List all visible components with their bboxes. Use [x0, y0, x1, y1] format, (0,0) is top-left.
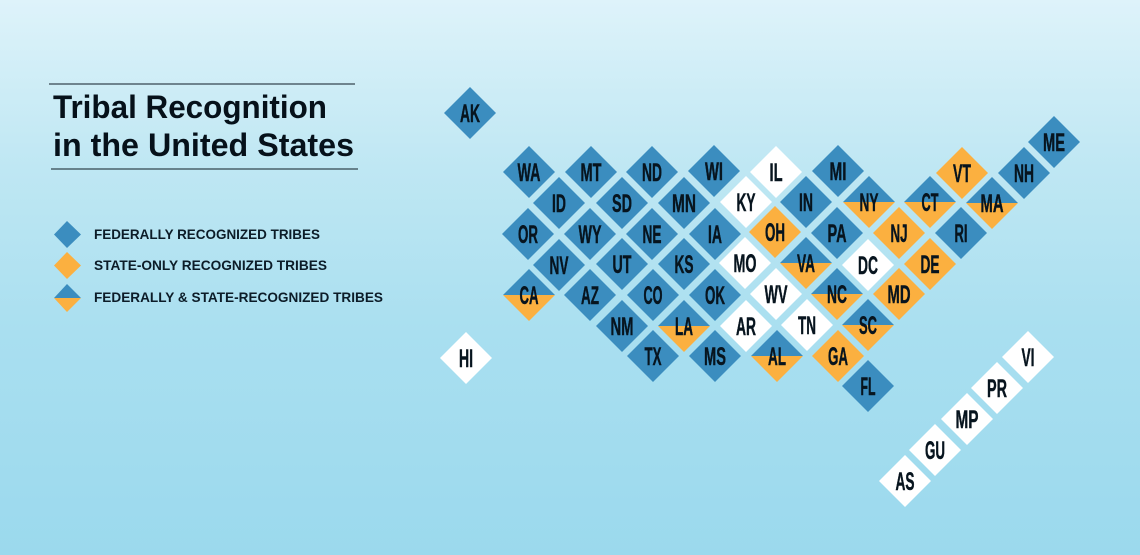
- tile: VT: [936, 147, 988, 199]
- tile: AL: AL: [768, 343, 786, 371]
- tile: OH: OH: [765, 219, 785, 247]
- tile: TX: TX: [644, 343, 662, 371]
- tile: DC: DC: [858, 252, 878, 280]
- tile: RI: RI: [954, 220, 968, 248]
- tile: AZ: AZ: [581, 282, 599, 310]
- tile: VI: [1002, 331, 1054, 383]
- tile: OH: [749, 206, 801, 258]
- tile: TN: [781, 299, 833, 351]
- tile: GA: [812, 330, 864, 382]
- tile: LA: LA: [675, 313, 693, 341]
- tile: OR: [502, 208, 554, 260]
- tile: ID: ID: [552, 190, 566, 218]
- title: in the United States: [53, 127, 354, 163]
- tile: NC: NC: [827, 281, 847, 309]
- legend item: federally and state recognized: [54, 284, 383, 312]
- tile: NE: [626, 208, 678, 260]
- tile: NH: NH: [1014, 160, 1034, 188]
- tile: TN: TN: [798, 312, 816, 340]
- tile: DE: [904, 238, 956, 290]
- tile: WA: WA: [518, 159, 540, 187]
- tile: OK: OK: [705, 282, 725, 310]
- legend: [54, 221, 383, 312]
- tile: AR: AR: [736, 313, 756, 341]
- tile: AK: [444, 87, 496, 139]
- tile: MO: MO: [734, 250, 756, 278]
- tile: VT: VT: [953, 160, 971, 188]
- title: Tribal Recognition: [53, 89, 327, 125]
- tile: GU: GU: [925, 437, 945, 465]
- tile: CT: CT: [922, 189, 938, 217]
- title: [49, 84, 358, 169]
- tile: MP: [941, 393, 993, 445]
- tile: TX: [627, 330, 679, 382]
- tile: ND: ND: [642, 159, 662, 187]
- tile: PA: PA: [828, 220, 846, 248]
- tile: IA: [689, 208, 741, 260]
- tile: CO: [627, 269, 679, 321]
- tile: MS: MS: [704, 343, 726, 371]
- tile: AS: AS: [896, 468, 914, 496]
- tile: MI: [812, 145, 864, 197]
- legend item: state-only recognized: STATE-ONLY RECOGNIZED TRIBES: [94, 257, 327, 273]
- tile: KY: KY: [736, 189, 756, 217]
- tile: CA: [503, 269, 555, 321]
- tile: MN: [658, 177, 710, 229]
- tile: FL: [842, 360, 894, 412]
- tile: SD: [596, 177, 648, 229]
- tile: RI: [935, 207, 987, 259]
- tile: OR: OR: [518, 221, 538, 249]
- tile: MT: MT: [581, 159, 601, 187]
- tile: CA: CA: [520, 282, 538, 310]
- tile: FL: FL: [860, 373, 876, 401]
- legend item: federally and state recognized: FEDERALLY & STATE-RECOGNIZED TRIBES: [94, 289, 383, 305]
- tile: AS: [879, 455, 931, 507]
- tile: WI: [688, 145, 740, 197]
- tile: NC: [811, 268, 863, 320]
- tile: NM: NM: [610, 313, 634, 341]
- tile: ME: [1028, 116, 1080, 168]
- tile: SC: SC: [859, 312, 877, 340]
- tile: NM: [596, 300, 648, 352]
- tile: ME: ME: [1043, 129, 1065, 157]
- tile: MS: [689, 330, 741, 382]
- tile: WI: WI: [705, 158, 723, 186]
- legend item: federally recognized: FEDERALLY RECOGNIZED TRIBES: [94, 226, 320, 242]
- tile: NY: [843, 176, 895, 228]
- tile: IA: IA: [708, 221, 722, 249]
- tile: NJ: NJ: [890, 220, 908, 248]
- tile: IN: IN: [799, 189, 813, 217]
- tile: WA: [503, 146, 555, 198]
- tile: UT: [596, 238, 648, 290]
- legend item: state-only recognized: [54, 252, 327, 279]
- tile: WY: WY: [578, 221, 602, 249]
- tile: HI: [440, 332, 492, 384]
- tile: GU: [909, 424, 961, 476]
- tile: PR: [971, 362, 1023, 414]
- tile: VA: VA: [797, 250, 815, 278]
- tile map: [440, 87, 1080, 507]
- tile: LA: [658, 300, 710, 352]
- tile: IL: [750, 146, 802, 198]
- tile: ID: [533, 177, 585, 229]
- tile: UT: UT: [612, 251, 632, 279]
- tile: MI: MI: [830, 158, 846, 186]
- tile: GA: GA: [828, 343, 848, 371]
- tile: NV: NV: [550, 252, 569, 280]
- tile: AZ: [564, 269, 616, 321]
- tile: MD: MD: [888, 281, 910, 309]
- legend item: federally recognized: [54, 221, 320, 248]
- tile: MA: MA: [980, 190, 1004, 218]
- tile: AR: [720, 300, 772, 352]
- tile: PA: [811, 207, 863, 259]
- tile: MP: MP: [956, 406, 978, 434]
- tile: KY: [720, 176, 772, 228]
- tile: WY: [564, 208, 616, 260]
- tile: MD: [873, 268, 925, 320]
- tile: MN: MN: [672, 190, 696, 218]
- tile: KS: [658, 238, 710, 290]
- tile: AL: [751, 330, 803, 382]
- tile: IN: [780, 176, 832, 228]
- tile: OK: [689, 269, 741, 321]
- tile: MT: [565, 146, 617, 198]
- tile: NE: NE: [642, 221, 662, 249]
- tile: NY: NY: [860, 189, 879, 217]
- tile: VI: VI: [1022, 344, 1034, 372]
- tile: HI: HI: [459, 345, 473, 373]
- tile: CT: [904, 176, 956, 228]
- tile: NJ: [873, 207, 925, 259]
- tile: CO: CO: [644, 282, 662, 310]
- tile: VA: [780, 237, 832, 289]
- tile: IL: IL: [770, 159, 782, 187]
- tile: WV: [750, 268, 802, 320]
- tile: WV: WV: [764, 281, 788, 309]
- tile: SC: [842, 299, 894, 351]
- tile: AK: AK: [460, 100, 480, 128]
- tile: DC: [842, 239, 894, 291]
- tile: NV: [533, 239, 585, 291]
- tile: KS: KS: [674, 251, 694, 279]
- tile: MO: [719, 237, 771, 289]
- tile: PR: PR: [987, 375, 1007, 403]
- tile: DE: DE: [920, 251, 940, 279]
- tile: SD: SD: [612, 190, 632, 218]
- tile: ND: [626, 146, 678, 198]
- tile: MA: [966, 177, 1018, 229]
- tile: NH: [998, 147, 1050, 199]
